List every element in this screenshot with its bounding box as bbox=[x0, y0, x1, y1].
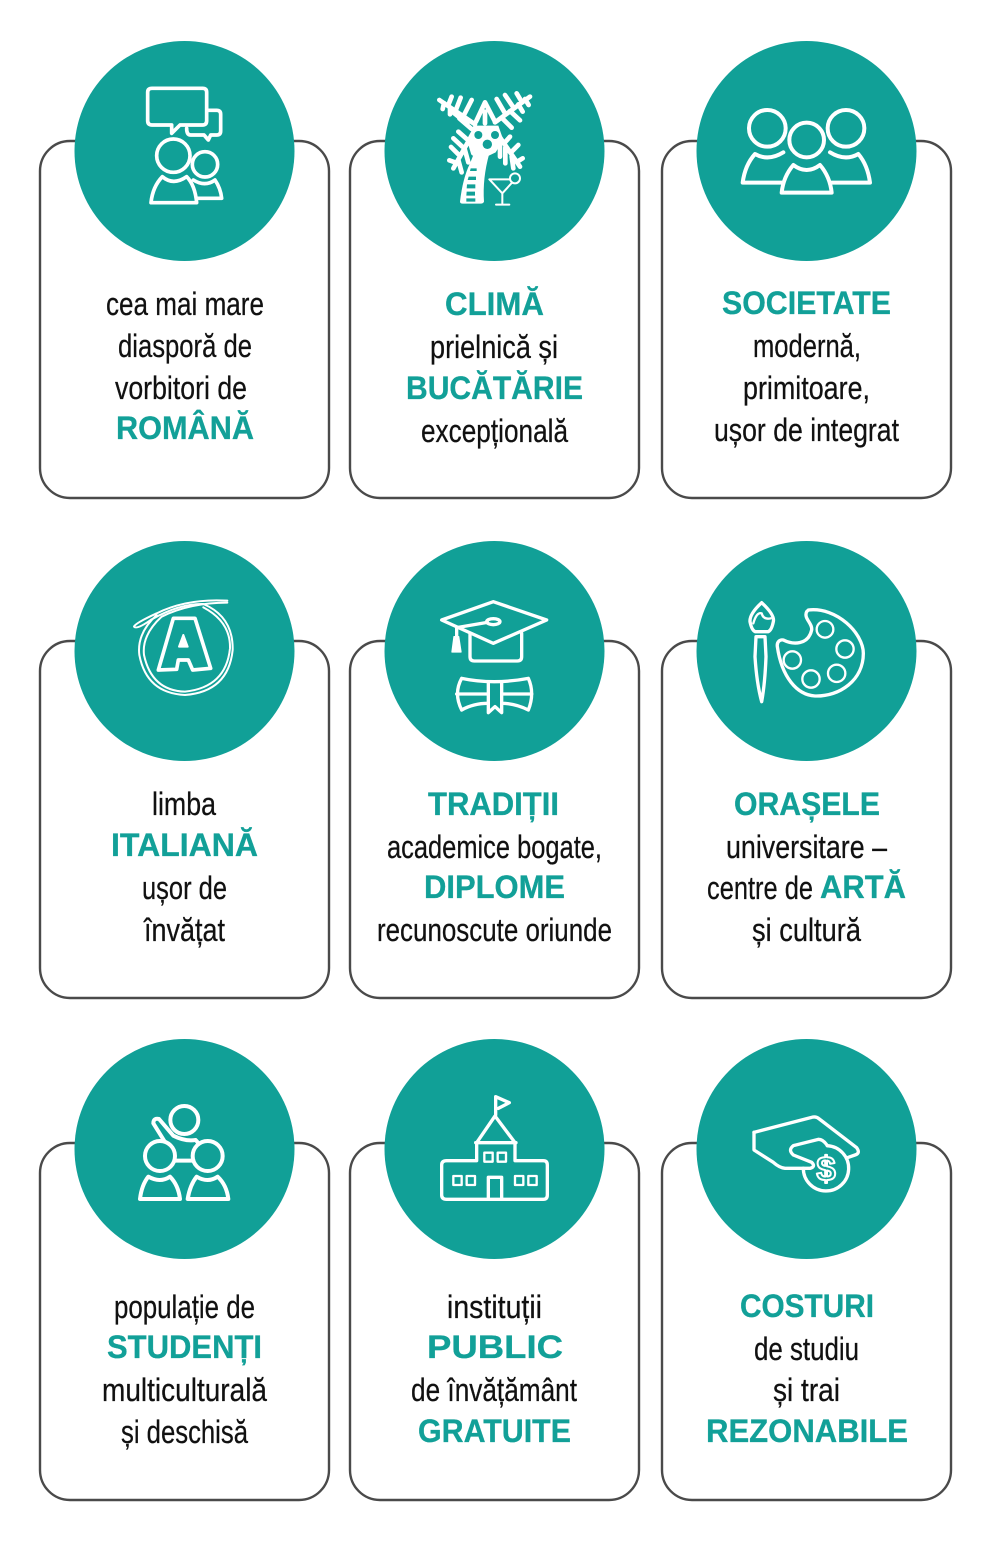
icon: graduation cap and diploma bbox=[442, 602, 547, 713]
text: centre de bbox=[707, 870, 813, 906]
icon: palm tree and cocktail bbox=[439, 93, 530, 205]
card bbox=[662, 641, 951, 998]
card bbox=[350, 1143, 639, 1500]
panel: society bbox=[662, 41, 951, 498]
text bbox=[106, 286, 264, 446]
text: universitare – bbox=[726, 829, 887, 865]
card bbox=[40, 141, 329, 498]
card bbox=[350, 641, 639, 998]
text: STUDENȚI bbox=[107, 1329, 262, 1365]
card bbox=[662, 141, 951, 498]
text: și cultură bbox=[752, 912, 861, 948]
panel: university cities bbox=[662, 541, 951, 998]
text: limba bbox=[152, 786, 216, 822]
text: modernă, bbox=[753, 328, 861, 364]
card bbox=[350, 141, 639, 498]
icon: student community bbox=[140, 1106, 228, 1199]
badge bbox=[696, 41, 916, 261]
panel: students bbox=[40, 1039, 329, 1500]
text: și trai bbox=[773, 1372, 840, 1408]
text: academice bogate, bbox=[387, 829, 602, 865]
icon: hand with coin bbox=[754, 1117, 858, 1191]
badge bbox=[696, 541, 916, 761]
panel: climate and food bbox=[350, 41, 639, 498]
badge bbox=[696, 1039, 916, 1259]
text bbox=[377, 786, 612, 948]
text: prielnică și bbox=[430, 329, 558, 365]
text bbox=[411, 1289, 577, 1449]
text bbox=[707, 786, 906, 948]
text: cea mai mare bbox=[106, 286, 264, 322]
icon: letter A in circle bbox=[134, 600, 233, 695]
text: primitoare, bbox=[743, 370, 870, 406]
badge bbox=[74, 1039, 294, 1259]
text: vorbitori de bbox=[115, 370, 247, 406]
text: DIPLOME bbox=[424, 869, 565, 905]
text: excepțională bbox=[421, 413, 568, 449]
text: REZONABILE bbox=[706, 1413, 908, 1449]
text: diasporă de bbox=[118, 328, 252, 364]
text: SOCIETATE bbox=[722, 285, 891, 321]
text: de studiu bbox=[754, 1331, 859, 1367]
icon: people talking bbox=[148, 88, 222, 203]
badge bbox=[384, 541, 604, 761]
panel: academic traditions bbox=[350, 541, 639, 998]
text bbox=[714, 285, 899, 448]
text: TRADIȚII bbox=[428, 786, 559, 822]
text: instituții bbox=[447, 1289, 542, 1325]
badge bbox=[74, 41, 294, 261]
icon: brush and palette bbox=[750, 603, 863, 702]
text: COSTURI bbox=[740, 1288, 874, 1324]
text: ARTĂ bbox=[820, 869, 906, 905]
panel: diaspora bbox=[40, 41, 329, 498]
card bbox=[40, 641, 329, 998]
text: ușor de bbox=[142, 870, 227, 906]
icon: school building bbox=[442, 1097, 547, 1199]
text: și deschisă bbox=[121, 1414, 248, 1450]
text: populație de bbox=[114, 1289, 255, 1325]
text: multiculturală bbox=[102, 1372, 267, 1408]
panel: public institutions bbox=[350, 1039, 639, 1500]
text: ROMÂNĂ bbox=[116, 410, 254, 446]
text bbox=[102, 1289, 267, 1450]
text: GRATUITE bbox=[418, 1413, 571, 1449]
text: recunoscute oriunde bbox=[377, 912, 612, 948]
card bbox=[40, 1143, 329, 1500]
text: PUBLIC bbox=[427, 1329, 563, 1365]
text: ușor de integrat bbox=[714, 412, 899, 448]
panel: costs bbox=[662, 1039, 951, 1500]
text bbox=[406, 286, 583, 449]
text bbox=[111, 786, 258, 948]
badge bbox=[74, 541, 294, 761]
text: învățat bbox=[143, 912, 225, 948]
text bbox=[706, 1288, 908, 1449]
text: ITALIANĂ bbox=[111, 827, 258, 863]
icon: group of people bbox=[743, 110, 870, 193]
icon: hand with coin: $ bbox=[816, 1150, 836, 1188]
text: BUCĂTĂRIE bbox=[406, 370, 583, 406]
badge bbox=[384, 41, 604, 261]
text: ORAȘELE bbox=[734, 786, 880, 822]
panel: italian language bbox=[40, 541, 329, 998]
text: de învățământ bbox=[411, 1372, 577, 1408]
badge bbox=[384, 1039, 604, 1259]
text: CLIMĂ bbox=[445, 286, 544, 322]
card bbox=[662, 1143, 951, 1500]
